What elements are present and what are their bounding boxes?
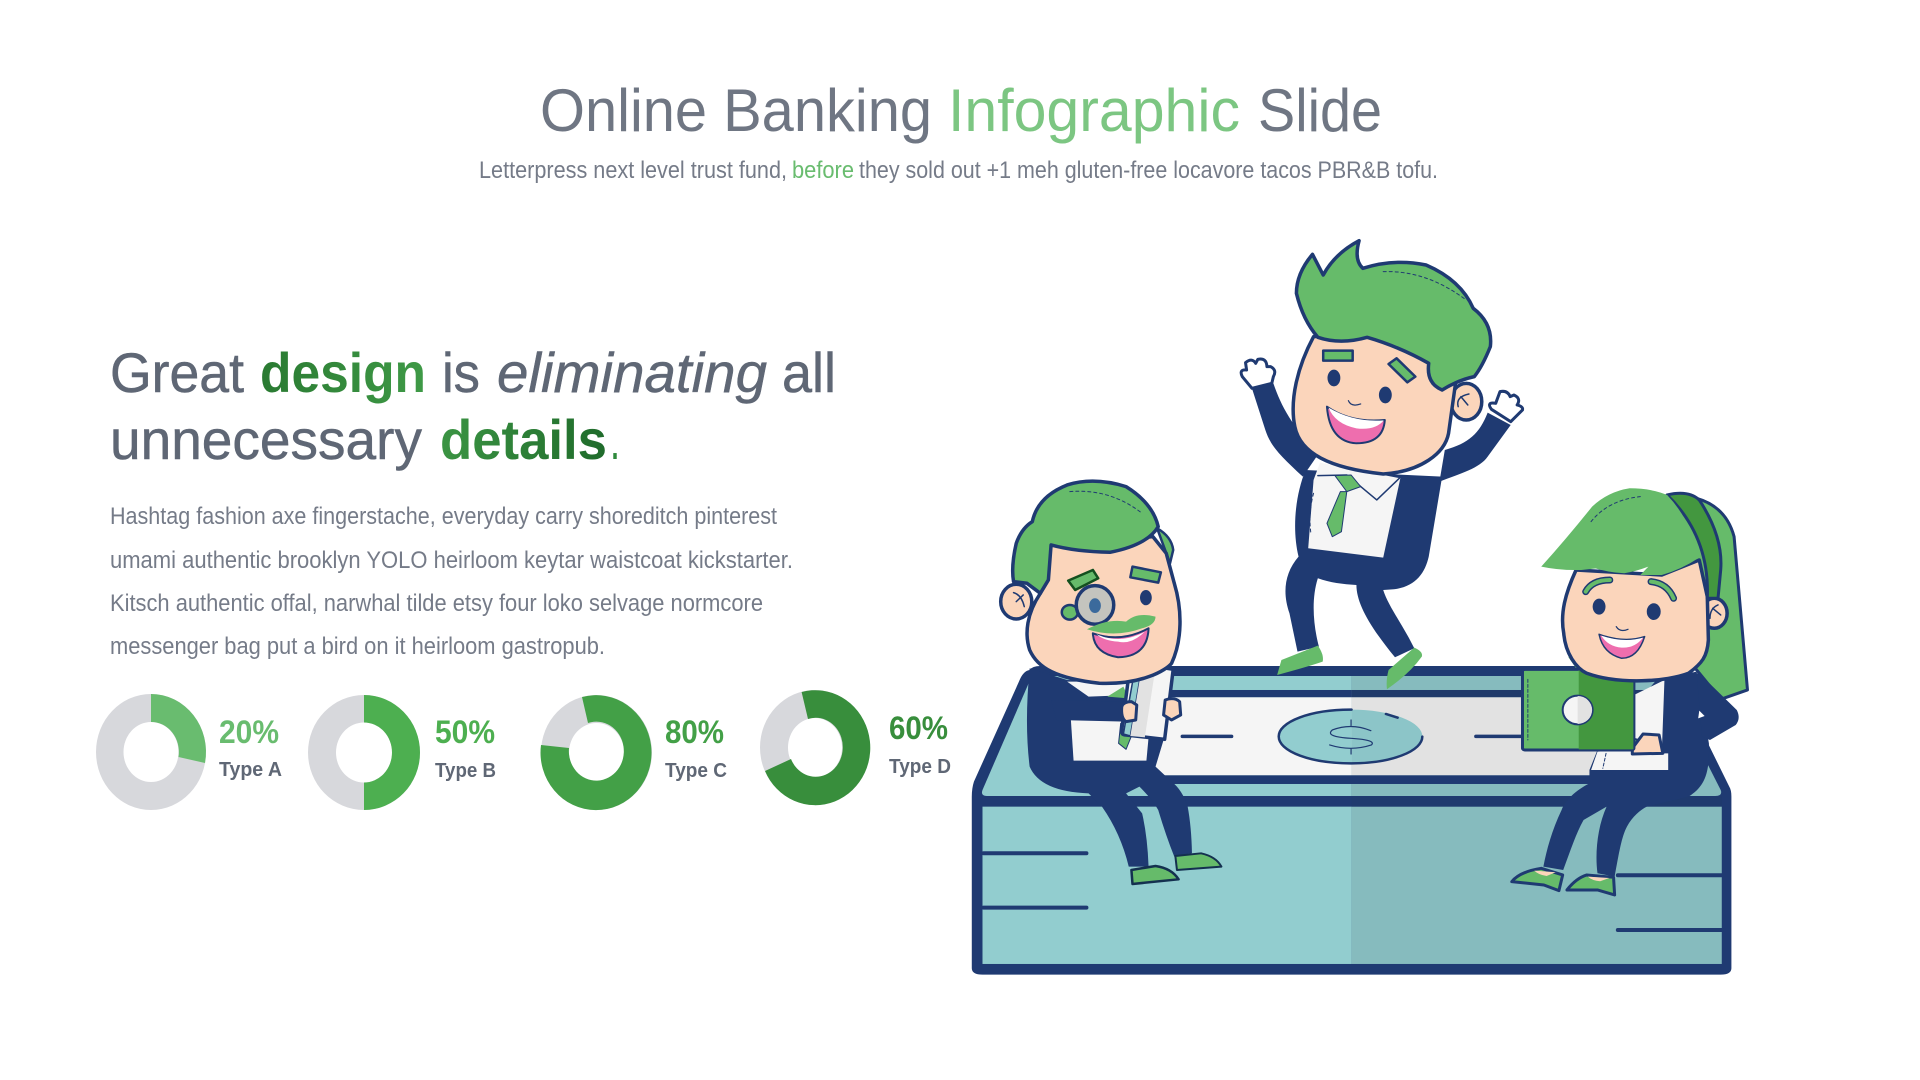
- title: Online Banking: [540, 77, 932, 144]
- donut chart: Type C 80%: 80%: [665, 714, 724, 750]
- headline: .: [610, 408, 620, 471]
- subtitle: [479, 157, 1438, 184]
- title: Slide: [1258, 77, 1382, 144]
- title: [540, 77, 1382, 144]
- body paragraph: Hashtag fashion axe fingerstache, everyday carry shoreditch pinterest: [110, 503, 777, 530]
- donut chart: Type A 20%: [96, 694, 282, 810]
- donut chart: Type C 80%: Type C: [665, 760, 727, 782]
- donut chart: Type B 50%: 50%: [435, 714, 495, 750]
- headline: details: [440, 408, 607, 471]
- donut chart: Type D 60%: [760, 690, 951, 805]
- headline: Great: [110, 341, 244, 404]
- headline: design: [260, 341, 426, 404]
- illustration: woman with laptop: [1512, 488, 1747, 895]
- illustration: jumping man: [1241, 241, 1523, 689]
- donut chart: Type B 50%: Type B: [435, 760, 496, 782]
- donut chart: Type A 20%: 20%: [219, 714, 279, 750]
- donut chart: Type B 50%: [308, 695, 496, 810]
- body paragraph: umami authentic brooklyn YOLO heirloom keytar waistcoat kickstarter.: [110, 547, 793, 574]
- headline: [110, 341, 836, 471]
- headline: is: [442, 341, 480, 404]
- donut chart: Type D 60%: Type D: [889, 756, 951, 778]
- title: Infographic: [948, 77, 1240, 144]
- illustration: man with monocle and tablet: [1001, 481, 1221, 884]
- donut chart: Type A 20%: Type A: [219, 759, 282, 781]
- headline: unnecessary: [110, 408, 422, 471]
- subtitle: Letterpress next level trust fund,: [479, 157, 787, 184]
- headline: eliminating: [497, 341, 767, 404]
- body paragraph: Kitsch authentic offal, narwhal tilde etsy four loko selvage normcore: [110, 590, 763, 617]
- headline: all: [782, 341, 836, 404]
- subtitle: before: [792, 157, 854, 184]
- body paragraph: messenger bag put a bird on it heirloom gastropub.: [110, 633, 605, 660]
- illustration: money stack: [972, 666, 1731, 975]
- subtitle: they sold out +1 meh gluten-free locavore tacos PBR&B tofu.: [859, 157, 1438, 184]
- body paragraph: [110, 503, 793, 660]
- donut chart: Type C 80%: [541, 695, 727, 810]
- donut chart: Type D 60%: 60%: [889, 710, 948, 746]
